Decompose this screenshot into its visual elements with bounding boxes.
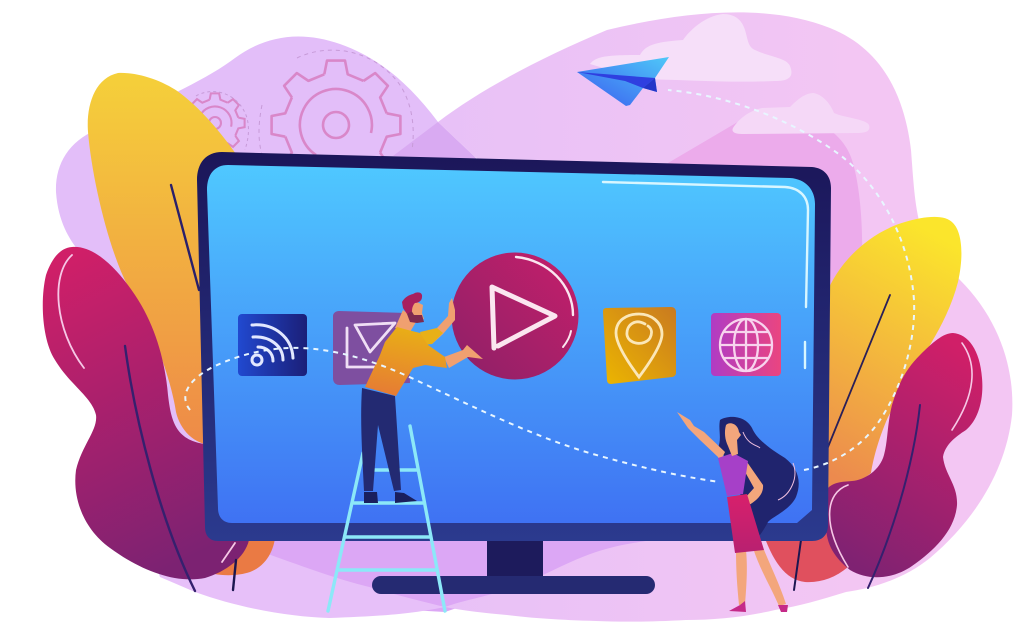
woman: face xyxy=(725,423,741,456)
background shape: darker lavender wedge xyxy=(393,122,478,160)
leaf: left yellow xyxy=(88,73,240,445)
leaf: left maroon xyxy=(43,247,249,579)
man: neck xyxy=(395,310,416,332)
man: back arm xyxy=(430,298,455,344)
cloud: small xyxy=(732,93,869,134)
man: shirt xyxy=(365,327,447,396)
background shape: mountain xyxy=(668,113,862,300)
app icon: location pin xyxy=(603,307,676,384)
background blob: pink xyxy=(438,12,1012,622)
app icon: mail xyxy=(333,311,410,385)
man: beard xyxy=(407,310,424,323)
leaf stems and highlights xyxy=(58,185,972,591)
woman: legs xyxy=(736,545,786,606)
man: back sleeve xyxy=(420,328,443,345)
icon: small gear xyxy=(185,92,248,153)
background blob: pale lavender lower left xyxy=(160,500,445,618)
man: front arm xyxy=(444,345,483,368)
screen reflection xyxy=(603,182,808,368)
background blob: lavender xyxy=(56,36,660,577)
man: head xyxy=(405,302,424,322)
monitor stand xyxy=(372,538,655,594)
monitor bezel xyxy=(197,152,831,541)
woman: hair xyxy=(718,417,799,535)
woman: arm raised xyxy=(677,412,725,462)
leaf: bottom left orange xyxy=(195,530,276,575)
woman: arm on hip xyxy=(744,462,763,506)
cloud: large xyxy=(590,14,791,82)
ladder xyxy=(328,426,445,611)
dashed orbit line xyxy=(185,90,914,482)
woman pointing xyxy=(677,412,799,612)
woman: top xyxy=(718,453,748,496)
man on ladder xyxy=(361,292,483,503)
woman: skirt xyxy=(727,494,764,553)
man: hair xyxy=(402,292,422,314)
man: trousers xyxy=(361,388,401,491)
leaf: right maroon xyxy=(826,333,982,577)
woman: shoes xyxy=(729,601,788,612)
background shape: darker lavender band below monitor xyxy=(250,535,670,612)
leaf: bottom right coral xyxy=(762,530,850,582)
man: shoes xyxy=(364,492,417,503)
leaf: right yellow xyxy=(815,217,961,490)
monitor screen xyxy=(207,165,815,523)
play button xyxy=(452,252,578,380)
app icon: wifi xyxy=(238,314,307,376)
app icon: globe xyxy=(711,313,781,376)
icon: large gear xyxy=(259,50,413,190)
icon: paper plane xyxy=(577,57,669,106)
